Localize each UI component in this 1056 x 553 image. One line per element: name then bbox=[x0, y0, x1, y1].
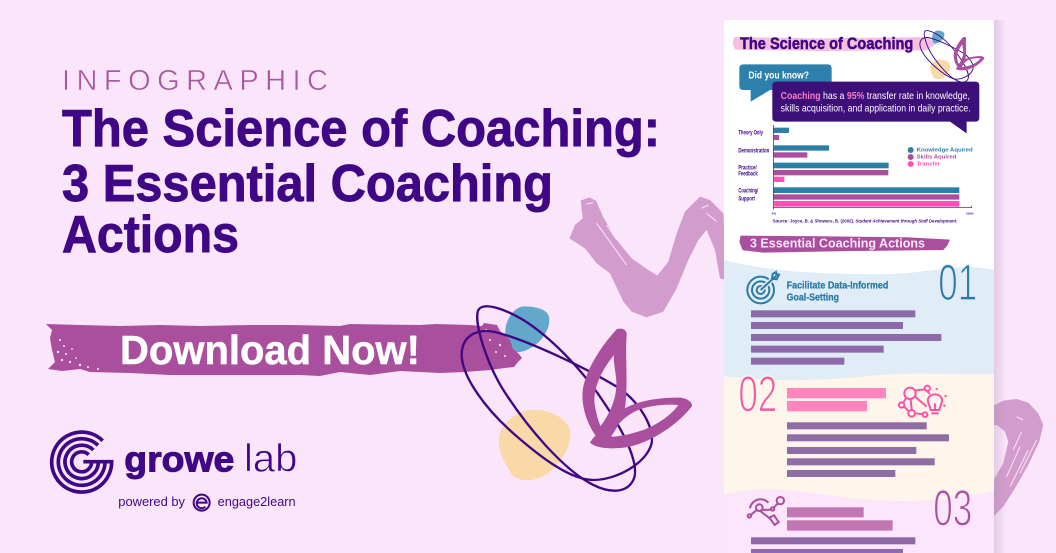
bar chart: Theory Only bbox=[738, 130, 763, 136]
mini decoration: loops and leaves bbox=[920, 31, 984, 82]
bar chart: Feedback bbox=[738, 172, 758, 178]
icon: target bbox=[747, 272, 779, 303]
download banner bbox=[46, 323, 522, 376]
decoration: loops and leaves bbox=[462, 306, 692, 491]
coaching callout bubble bbox=[772, 82, 979, 133]
engage2learn mark bbox=[194, 495, 210, 511]
heading brush bbox=[733, 37, 937, 51]
section 2 text bars bbox=[787, 422, 949, 477]
number 02: 02 bbox=[738, 366, 777, 423]
number 03: 03 bbox=[933, 480, 972, 537]
section 1 heading: Goal-Setting bbox=[787, 292, 839, 303]
infographic page bbox=[724, 20, 994, 553]
page shadow bbox=[994, 20, 1006, 553]
callout text: skills acquisition, and application in daily practice. bbox=[781, 104, 971, 115]
bar chart: Support bbox=[738, 196, 755, 202]
section band: yellow bbox=[724, 374, 994, 500]
icon: network and light bulb bbox=[899, 386, 947, 417]
logo mark bbox=[52, 432, 112, 492]
brush stroke: right of page bbox=[992, 399, 1043, 516]
engage2learn text: engage2learn bbox=[218, 495, 296, 509]
eyebrow: INFOGRAPHIC: INFOGRAPHIC bbox=[62, 65, 328, 97]
section band: pink bbox=[724, 489, 994, 553]
section 3 heading bars bbox=[787, 507, 893, 531]
actions heading brush bbox=[739, 236, 950, 253]
bar chart: 0% bbox=[772, 211, 776, 215]
title: 3 Essential Coaching bbox=[62, 155, 553, 213]
title bbox=[62, 100, 660, 264]
decoration: blue and yellow blobs bbox=[499, 307, 570, 480]
legend bbox=[908, 147, 973, 168]
title: The Science of Coaching: bbox=[62, 100, 660, 158]
callout text bbox=[781, 91, 971, 115]
logo: growe lab bbox=[52, 432, 297, 511]
heading text: The Science of Coaching bbox=[740, 34, 913, 53]
section 1 heading: Facilitate Data-Informed bbox=[787, 281, 888, 292]
section band: blue bbox=[724, 260, 994, 385]
number 01: 01 bbox=[938, 255, 977, 312]
bar chart: 100% bbox=[966, 211, 974, 215]
Did you know text: Did you know? bbox=[748, 70, 809, 81]
bar chart: Practice/ bbox=[738, 165, 757, 171]
actions heading text: 3 Essential Coaching Actions bbox=[750, 236, 925, 250]
brush band bbox=[46, 323, 522, 376]
band texture bbox=[57, 329, 506, 370]
bar chart: Coaching/ bbox=[738, 189, 759, 195]
section 1 text bars bbox=[751, 310, 941, 365]
bar chart bbox=[738, 125, 974, 215]
source note: Source: Joyce, B. & Showers, B. (2002). Student Achievement through Staff Development. bbox=[773, 218, 957, 223]
section 2 heading bars bbox=[787, 388, 886, 411]
Did you know bubble bbox=[739, 64, 832, 102]
icon: analytics magnifier bbox=[748, 497, 784, 525]
page heading group bbox=[733, 34, 979, 253]
legend: Knowledge Aquired bbox=[917, 148, 973, 154]
section 3 text bars bbox=[751, 537, 915, 553]
wordmark: growe bbox=[124, 439, 234, 480]
button label: Download Now! bbox=[120, 327, 420, 373]
callout text: Coaching has a 95% transfer rate in knowledge, bbox=[781, 91, 970, 102]
logo: growe lab: lab bbox=[244, 438, 297, 481]
lower section group bbox=[738, 255, 977, 553]
brush stroke: V behind page bbox=[569, 197, 727, 317]
bar chart: Demonstration bbox=[738, 149, 770, 155]
powered by: powered by bbox=[118, 495, 186, 509]
legend: Skills Aquired bbox=[917, 155, 957, 161]
title: Actions bbox=[62, 206, 239, 264]
legend: Transfer bbox=[917, 162, 941, 168]
section 1 heading bbox=[787, 281, 888, 303]
